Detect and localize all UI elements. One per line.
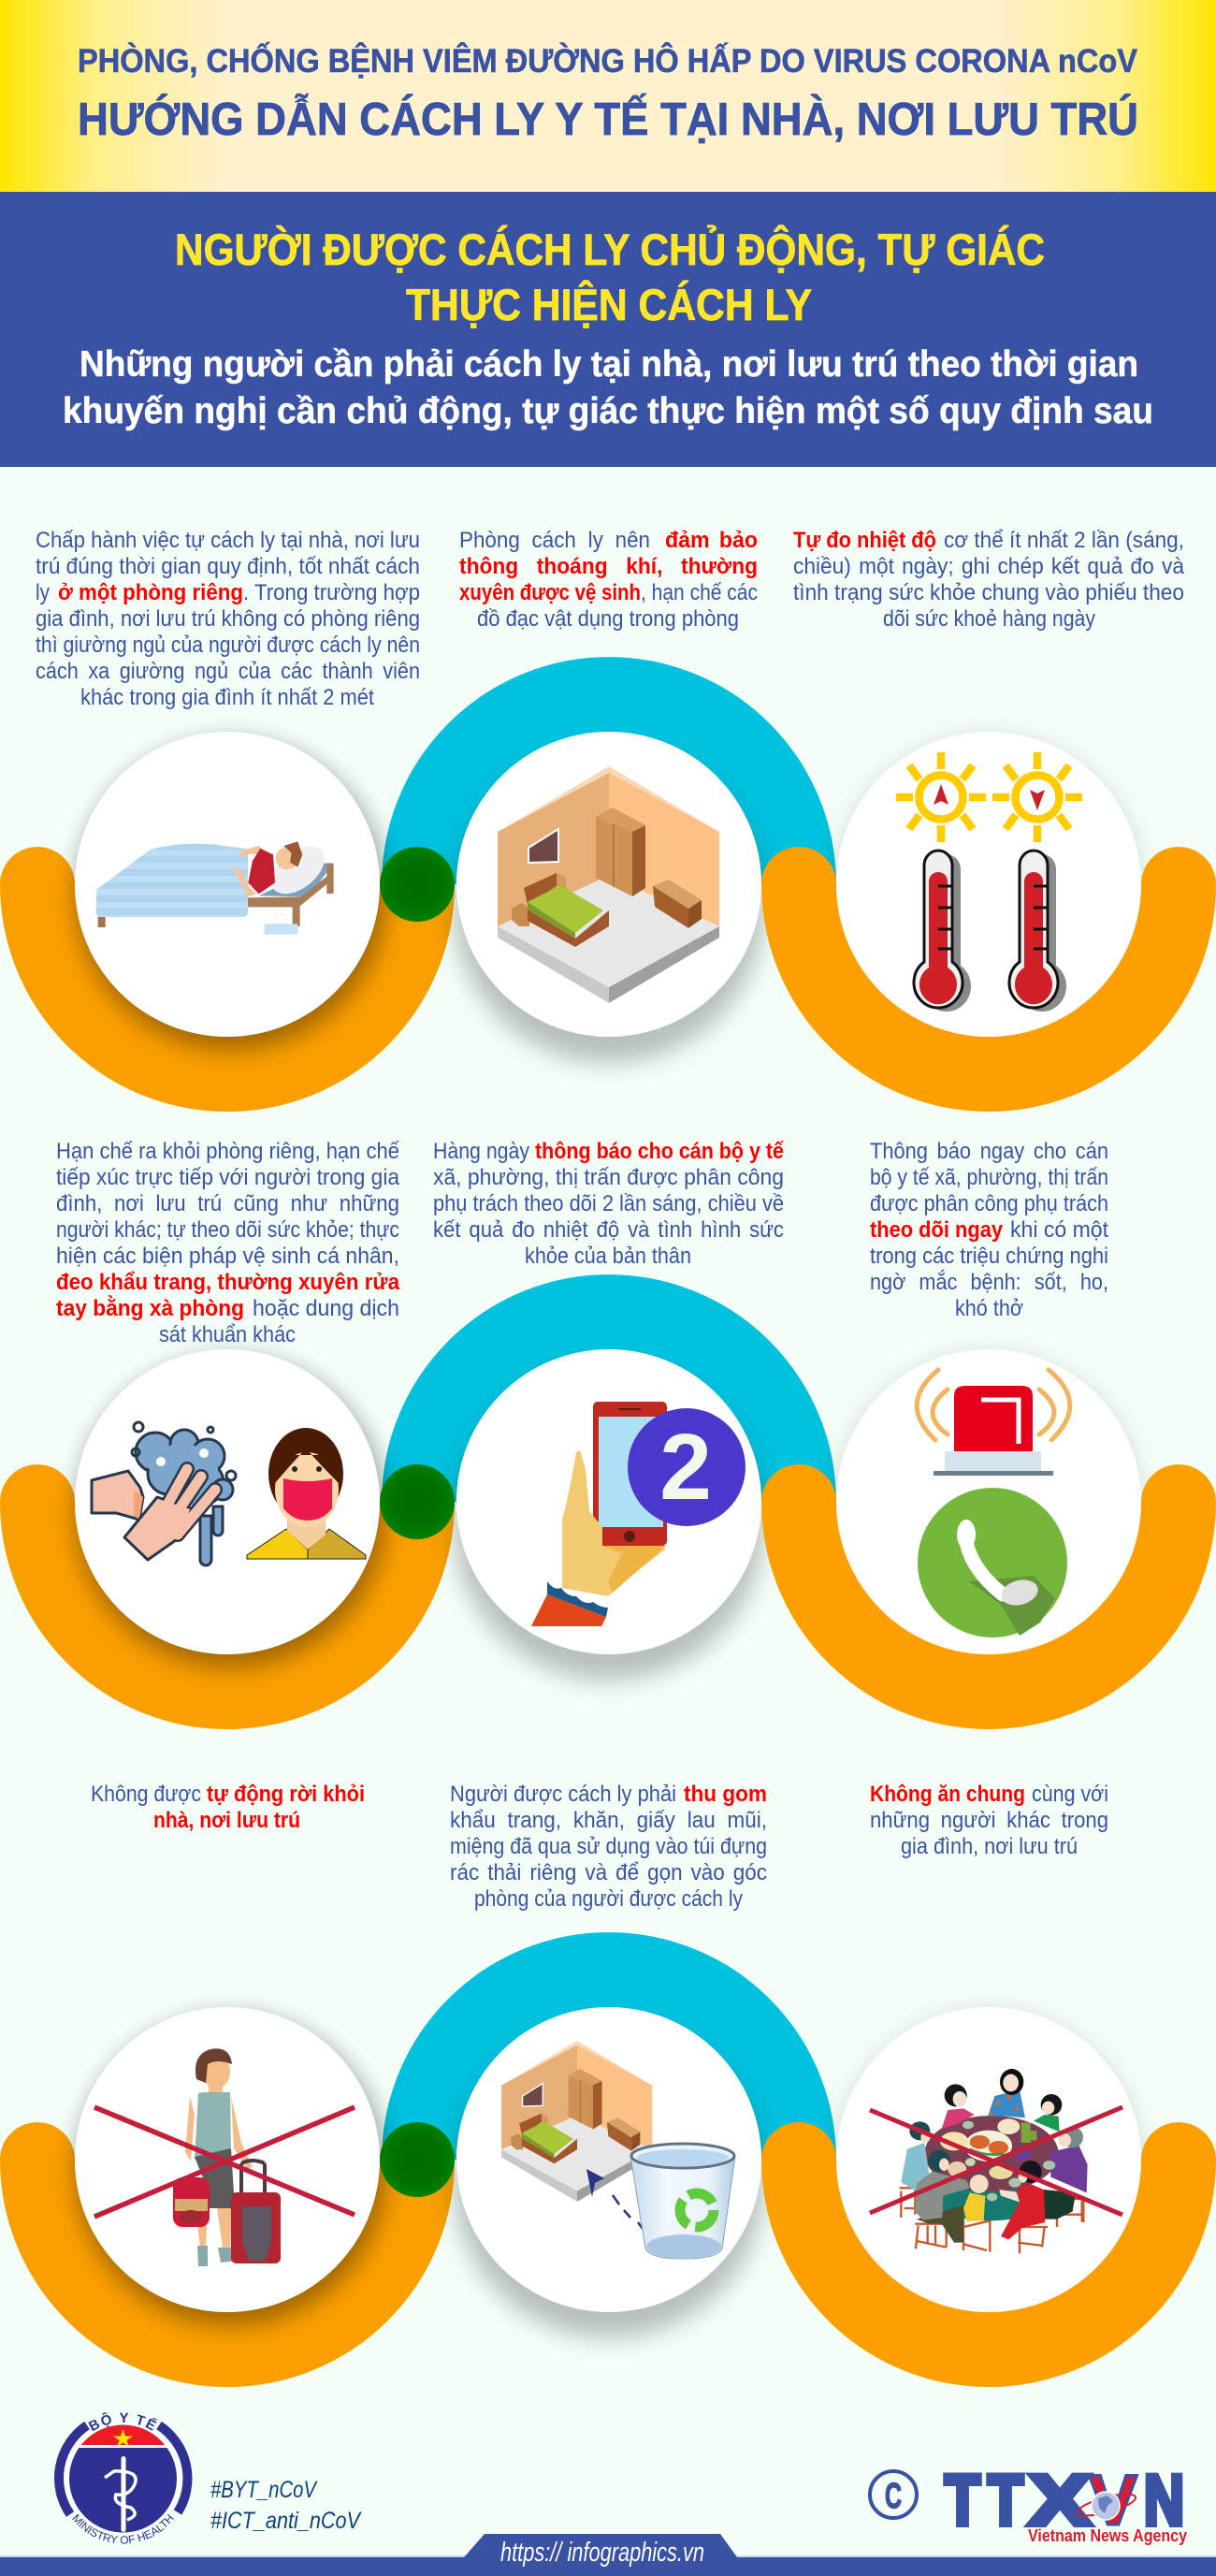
text block: step 1: gia đình, nơi lưu trú không có phòng riêng — [36, 606, 420, 632]
title line 2: HƯỚNG DẪN CÁCH LY Y TẾ TẠI NHÀ, NƠI LƯU TRÚ — [78, 94, 1138, 145]
child — [963, 2175, 997, 2221]
text block: step 7: nhà, nơi lưu trú — [153, 1808, 300, 1833]
table top — [924, 2116, 1059, 2191]
text block: step 9 — [870, 1782, 1108, 1859]
text block: step 1: trú đúng thời gian quy định, tốt nhất cách — [36, 554, 420, 579]
logo: copyright TTXVN: C — [885, 2477, 902, 2516]
text block: step 8 — [450, 1782, 767, 1912]
title line 1: PHÒNG, CHỐNG BỆNH VIÊM ĐƯỜNG HÔ HẤP DO VIRUS CORONA nCoV — [78, 42, 1138, 80]
text block: step 1: khác trong gia đình ít nhất 2 mét — [80, 685, 374, 710]
text block: step 2: đồ đạc vật dụng trong phòng — [477, 606, 739, 632]
dishes — [940, 2118, 1036, 2179]
panel: bed illustration — [75, 732, 380, 1037]
hashtags: #ICT_anti_nCoV — [210, 2508, 362, 2534]
text block: step 6 — [870, 1139, 1108, 1321]
logo: copyright TTXVN: V — [1089, 2461, 1137, 2540]
text block: step 6: bộ y tế xã, phường, thị trấn — [870, 1165, 1108, 1190]
panel: thermometers and suns — [836, 732, 1141, 1037]
icon: arrow — [586, 2169, 645, 2233]
icon: hand holding phone — [562, 1450, 666, 1596]
text block: step 7: tự động rời khỏi — [207, 1782, 365, 1807]
text block: step 3: dõi sức khoẻ hàng ngày — [883, 606, 1095, 632]
text block: step 6: được phân công phụ trách — [870, 1191, 1108, 1216]
hashtags — [210, 2477, 362, 2534]
icon: washing hands — [92, 1422, 236, 1565]
logo: Ministry of Health — [54, 2412, 193, 2544]
icon: green call button — [918, 1488, 1067, 1637]
panel: alarm and phone call — [836, 1349, 1141, 1654]
text block: step 4 — [56, 1139, 400, 1347]
ring band row 3 — [37, 1970, 1179, 2350]
text block: step 1: . Trong trường hợp — [243, 580, 420, 605]
text block: step 4: Hạn chế ra khỏi phòng riêng, hạn chế — [56, 1139, 400, 1164]
subheading line 2: khuyến nghị cần chủ động, tự giác thực hiện một số quy định sau — [63, 391, 1153, 431]
text block: step 1: ly — [36, 580, 50, 605]
text block: step 3: tình trạng sức khỏe chung vào phiếu theo — [793, 580, 1184, 605]
text block: step 5 — [433, 1139, 785, 1269]
text block: step 9: những người khác trong — [870, 1808, 1108, 1833]
text block: step 4: hiện các biện pháp vệ sinh cá nhân, — [56, 1244, 399, 1269]
text block: step 4: hoặc dung dịch — [253, 1296, 399, 1321]
text block: step 6: khi có một — [1010, 1217, 1108, 1243]
header band: yellow title area — [0, 0, 1216, 192]
text block: step 6: Thông báo ngay cho cán — [870, 1139, 1108, 1164]
text block: step 3: chiều) một ngày; ghi chép kết quả đo và — [793, 554, 1185, 579]
subheading line 1: Những người cần phải cách ly tại nhà, nơi lưu trú theo thời gian — [80, 344, 1138, 385]
icon: red cross — [94, 2107, 355, 2217]
girl red dress — [999, 2161, 1045, 2239]
text block: step 6: trong các triệu chứng nghi — [870, 1244, 1108, 1269]
icon: phone — [593, 1402, 667, 1546]
panel: phone notification: 2 — [659, 1415, 712, 1520]
logo: copyright TTXVN: T — [988, 2461, 1023, 2540]
text block: step 8: rác thải riêng và để gọn vào góc — [450, 1860, 767, 1885]
panel: no leaving home — [75, 2007, 380, 2312]
icon: thermometer 1 — [914, 851, 971, 1011]
text block: step 5: khỏe của bản thân — [525, 1244, 691, 1269]
icon: small room — [501, 2041, 652, 2202]
text block: step 4: tiếp xúc trực tiếp với người trong gia — [56, 1165, 400, 1190]
hashtags: #BYT_nCoV — [210, 2477, 318, 2503]
man grey — [915, 2150, 970, 2243]
url: https:// infographics.vn — [500, 2538, 704, 2568]
text block: step 6: theo dõi ngay — [870, 1217, 1004, 1243]
text block: step 7 — [91, 1782, 365, 1833]
text block: step 5: thông báo cho cán bộ y tế — [535, 1139, 785, 1164]
url tab — [464, 2534, 737, 2557]
text block: step 1: Chấp hành việc tự cách ly tại nhà, nơi lưu — [36, 528, 420, 553]
text block: step 4: sát khuẩn khác — [159, 1322, 296, 1347]
text block: step 9: cùng với — [1032, 1782, 1108, 1807]
panel: room and rubbish bin — [456, 2007, 761, 2312]
grandmother — [1043, 2127, 1088, 2219]
footer bar — [0, 2534, 1216, 2576]
icon: cuff — [531, 1594, 606, 1626]
text block: step 5: Hàng ngày — [433, 1139, 529, 1164]
heading: NGƯỜI ĐƯỢC CÁCH LY CHỦ ĐỘNG, TỰ GIÁC — [175, 225, 1045, 274]
logo: copyright TTXVN: N — [1144, 2461, 1184, 2540]
intro panel: blue band — [0, 192, 1216, 467]
text block: step 2: thông thoáng khí, thường — [459, 554, 758, 579]
icon: family dinner table — [900, 2069, 1088, 2253]
text block: step 8: Người được cách ly phải — [450, 1782, 676, 1807]
text block: step 2 — [459, 528, 758, 632]
icon: thermometer 2 — [1009, 851, 1066, 1011]
text block: step 1: thì giường ngủ của người được cách ly nên — [36, 633, 420, 658]
text block: step 1 — [36, 528, 420, 710]
icon: alarm light — [917, 1370, 1070, 1476]
text block: step 6: khó thở — [955, 1296, 1023, 1321]
text block: step 2: xuyên được vệ sinh — [459, 580, 641, 605]
text block: step 1: cách xa giường ngủ của các thành viên — [36, 659, 420, 684]
text block: step 2: Phòng cách ly nên — [459, 528, 650, 553]
text block: step 3 — [793, 528, 1185, 632]
text block: step 5: phụ trách theo dõi 2 lần sáng, chiều về — [433, 1191, 784, 1216]
icon: red cross — [870, 2107, 1122, 2215]
man left — [901, 2121, 930, 2191]
ring band row 2 — [37, 1312, 1179, 1692]
text block: step 2: đảm bảo — [665, 528, 758, 553]
text block: step 5: kết quả đo nhiệt độ và tình hình sức — [433, 1217, 784, 1243]
text block: step 7: Không được — [91, 1782, 201, 1807]
ring band row 1 — [37, 694, 1179, 1074]
text block: step 9: Không ăn chung — [870, 1782, 1025, 1807]
text block: step 4: tay bằng xà phòng — [56, 1295, 244, 1321]
text block: step 8: phòng của người được cách ly — [474, 1886, 743, 1912]
panel: room illustration — [456, 732, 761, 1037]
icon: rubbish bin — [630, 2144, 735, 2259]
text block: step 1: ở một phòng riêng — [58, 580, 243, 605]
text block: step 8: miệng đã qua sử dụng vào túi đựng — [450, 1834, 767, 1859]
text block: step 8: thu gom — [684, 1782, 767, 1807]
panel: no shared meals — [836, 2007, 1141, 2312]
text block: step 4: đình, nơi lưu trú cũng như những — [56, 1191, 399, 1216]
panel: phone notification — [456, 1349, 761, 1654]
text block: step 3: Tự đo nhiệt độ — [793, 528, 936, 553]
logo: copyright TTXVN: X — [1029, 2461, 1091, 2540]
icon: suns — [896, 752, 1082, 842]
heading line 2: THỰC HIỆN CÁCH LY — [406, 280, 812, 329]
text block: step 5: xã, phường, thị trấn được phân công — [433, 1165, 784, 1190]
text block: step 2: , hạn chế các — [641, 580, 758, 605]
panel: hand washing and face mask — [75, 1349, 380, 1654]
text block: step 3: cơ thể ít nhất 2 lần (sáng, — [944, 528, 1184, 553]
logo: copyright TTXVN — [870, 2461, 1187, 2545]
icon: traveller — [173, 2048, 281, 2266]
logo: copyright TTXVN: T — [945, 2461, 980, 2540]
logo: copyright TTXVN: Vietnam News Agency — [1028, 2526, 1187, 2545]
text block: step 9: gia đình, nơi lưu trú — [901, 1834, 1078, 1859]
text block: step 4: người khác; tự theo dõi sức khỏe; thực — [56, 1217, 399, 1243]
text block: step 8: khẩu trang, khăn, giấy lau mũi, — [450, 1808, 767, 1833]
text block: step 4: đeo khẩu trang, thường xuyên rửa — [56, 1270, 400, 1295]
logo: Ministry of Health: BỘ Y TẾ — [88, 2412, 158, 2431]
icon: number badge 2 — [628, 1408, 746, 1526]
text block: step 6: ngờ mắc bệnh: sốt, ho, — [870, 1270, 1108, 1295]
icon: person with mask — [247, 1428, 366, 1559]
logo: Ministry of Health: MINISTRY OF HEALTH — [72, 2513, 174, 2544]
